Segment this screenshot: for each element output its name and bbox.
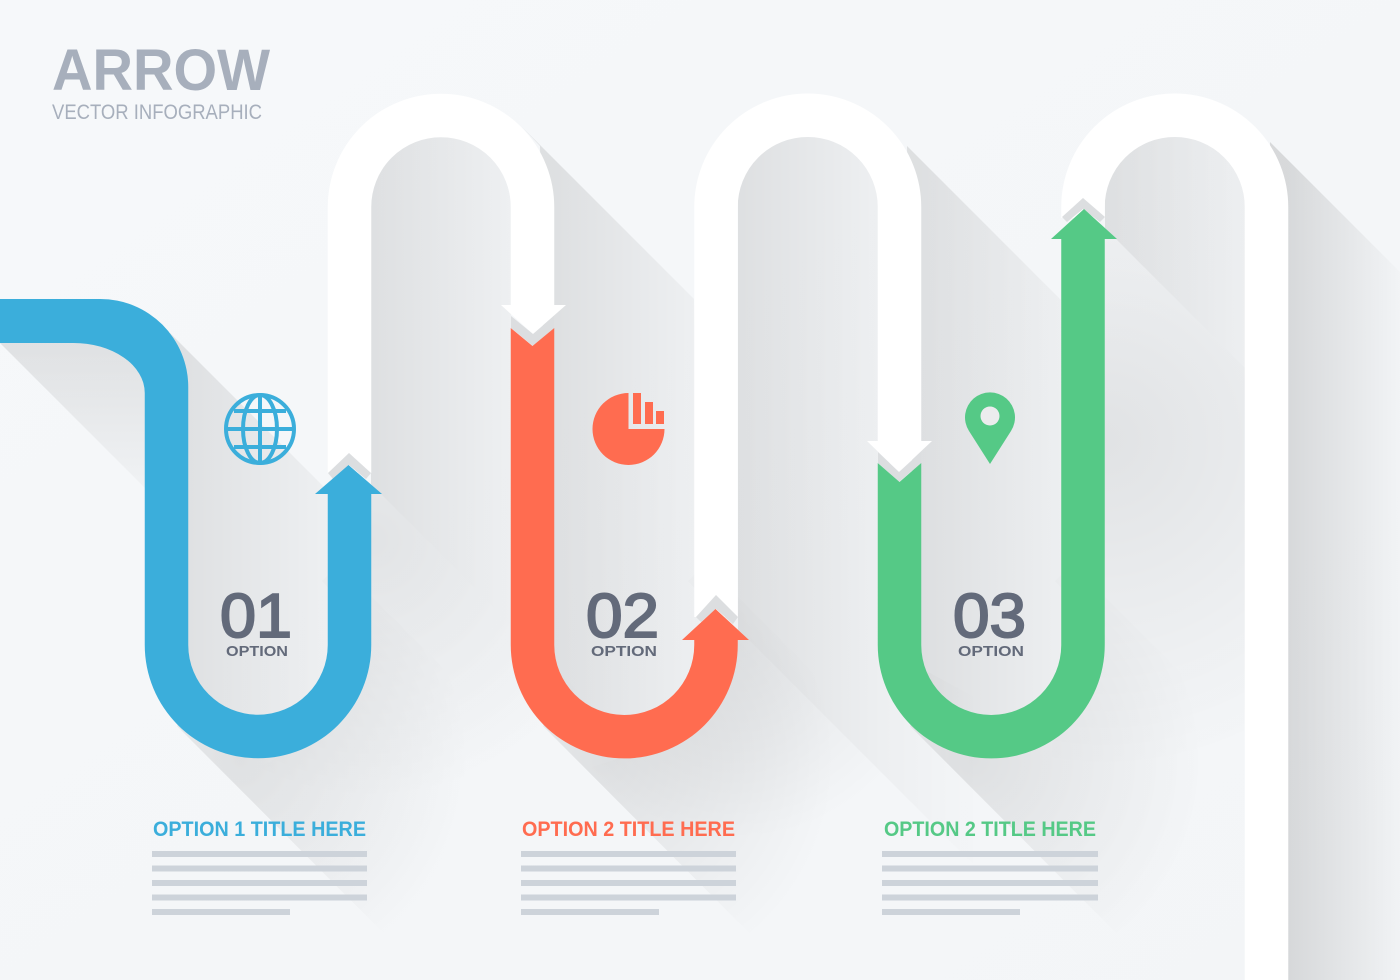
title: ARROW <box>52 38 270 103</box>
blue arrow <box>0 299 382 758</box>
option 03 label: 03 <box>953 582 1026 651</box>
title: VECTOR INFOGRAPHIC <box>52 101 262 124</box>
option 02 label: 02 <box>586 582 659 651</box>
red arrow <box>511 328 749 758</box>
text block: option 2 <box>521 818 736 915</box>
option 01 label: OPTION <box>226 643 288 660</box>
text block: option 3 <box>882 818 1098 915</box>
white arrow 2 <box>716 115 932 617</box>
white arrow 3 <box>1083 115 1266 980</box>
text block: option 3: OPTION 2 TITLE HERE <box>884 818 1096 841</box>
icon: map pin <box>965 392 1015 464</box>
option 02 label: OPTION <box>591 643 657 660</box>
arrow head shadows <box>328 198 1105 624</box>
option 01 label: 01 <box>220 582 292 651</box>
green arrow <box>878 209 1117 758</box>
icon: pie chart <box>592 393 664 465</box>
text block: option 1: OPTION 1 TITLE HERE <box>153 818 366 841</box>
text block: option 2: OPTION 2 TITLE HERE <box>522 818 735 841</box>
icon: globe <box>226 395 294 463</box>
white arrow 1 <box>350 115 566 473</box>
option 03 label: OPTION <box>958 643 1024 660</box>
text block: option 1 <box>152 818 367 915</box>
